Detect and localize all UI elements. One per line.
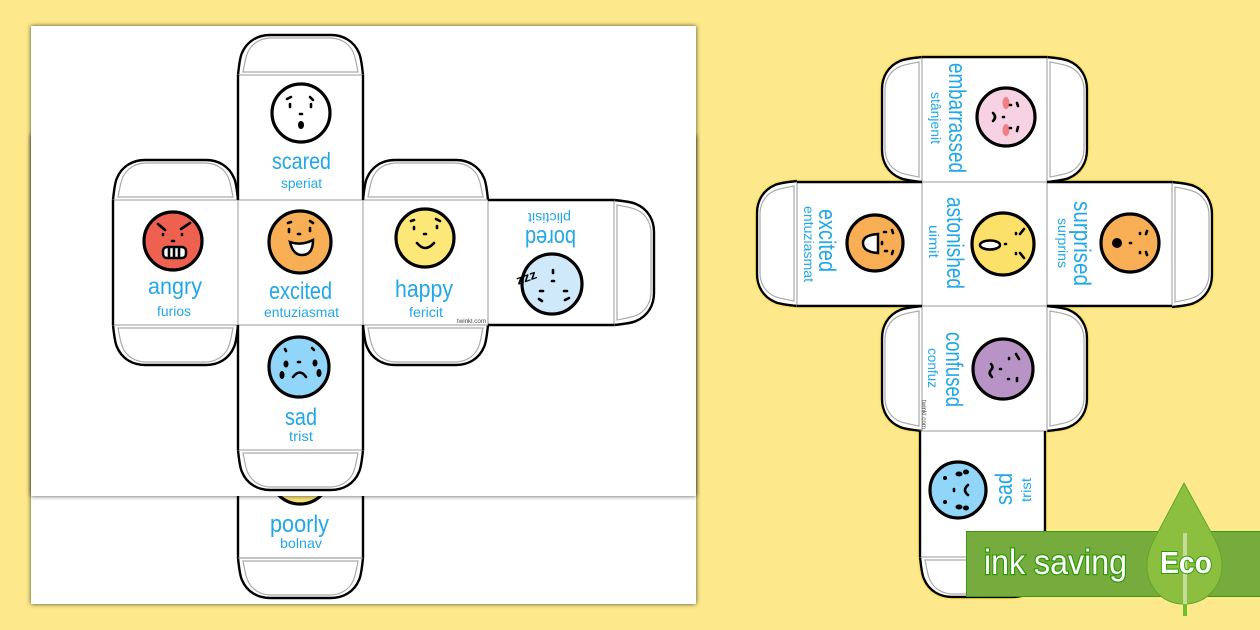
text: sad rotated: sad: [991, 473, 1018, 505]
text: embarrassed: embarrassed: [943, 63, 970, 173]
text: twinkl.com rotated: twinkl.com: [920, 400, 926, 429]
text: excited rotated: excited: [813, 209, 840, 272]
text: furios: furios: [157, 303, 191, 319]
icon: bored face: [522, 254, 582, 314]
text: bored: bored: [525, 224, 576, 251]
icon: eco leaf: [1147, 483, 1222, 616]
back sheet net square: poorly: [238, 450, 363, 598]
icon: happy face: [396, 209, 454, 267]
back sheet net square: poorly: bolnav: [280, 535, 322, 551]
text: scared: scared: [272, 148, 331, 174]
partial yellow face behind the front sheet: [270, 444, 330, 504]
text: angry: angry: [148, 273, 202, 299]
text: speriat: speriat: [281, 175, 322, 191]
icon: surprised face: [1101, 214, 1159, 272]
icon: sad face: [269, 337, 329, 397]
text: twinkl.com: twinkl.com: [457, 319, 486, 325]
text: uimit: uimit: [926, 225, 942, 258]
text: fericit: fericit: [409, 304, 443, 320]
icon: angry face: [144, 212, 202, 270]
text: entuziasmat rotated: entuziasmat: [801, 206, 817, 282]
text: ink saving: ink saving: [984, 543, 1127, 582]
text: zzz: zzz: [514, 266, 539, 288]
text: happy: happy: [395, 276, 453, 303]
text: sad: sad: [285, 404, 317, 431]
icon: excited face: [269, 211, 331, 273]
text: confused: confused: [940, 332, 967, 407]
text: entuziasmat: entuziasmat: [264, 304, 339, 320]
icon: confused face: [973, 339, 1033, 399]
icon: sad face rotated: [930, 462, 986, 518]
text: Eco: Eco: [1160, 545, 1212, 580]
dice net: right: [757, 57, 1212, 597]
text: trist rotated: trist: [1018, 478, 1034, 502]
text: trist: trist: [289, 428, 313, 444]
back sheet net square: poorly: poorly: [270, 511, 329, 538]
text: plictisit: plictisit: [528, 210, 571, 226]
panel: back sheet: [31, 135, 696, 604]
banner: ink saving: [966, 483, 1260, 616]
text: confuz: confuz: [925, 348, 941, 388]
icon: excited face rotated: [847, 215, 903, 271]
icon: embarrassed face: [977, 88, 1035, 146]
panel: front sheet: [31, 26, 696, 496]
dice net: left: [113, 35, 654, 490]
text: surprised: surprised: [1068, 201, 1095, 286]
icon: astonished face: [972, 213, 1034, 275]
text: stanjenit: stânjenit: [928, 92, 944, 144]
text: surprins: surprins: [1055, 218, 1071, 268]
text: excited: excited: [269, 278, 332, 305]
icon: scared face: [272, 84, 330, 142]
text: astonished: astonished: [941, 197, 968, 289]
